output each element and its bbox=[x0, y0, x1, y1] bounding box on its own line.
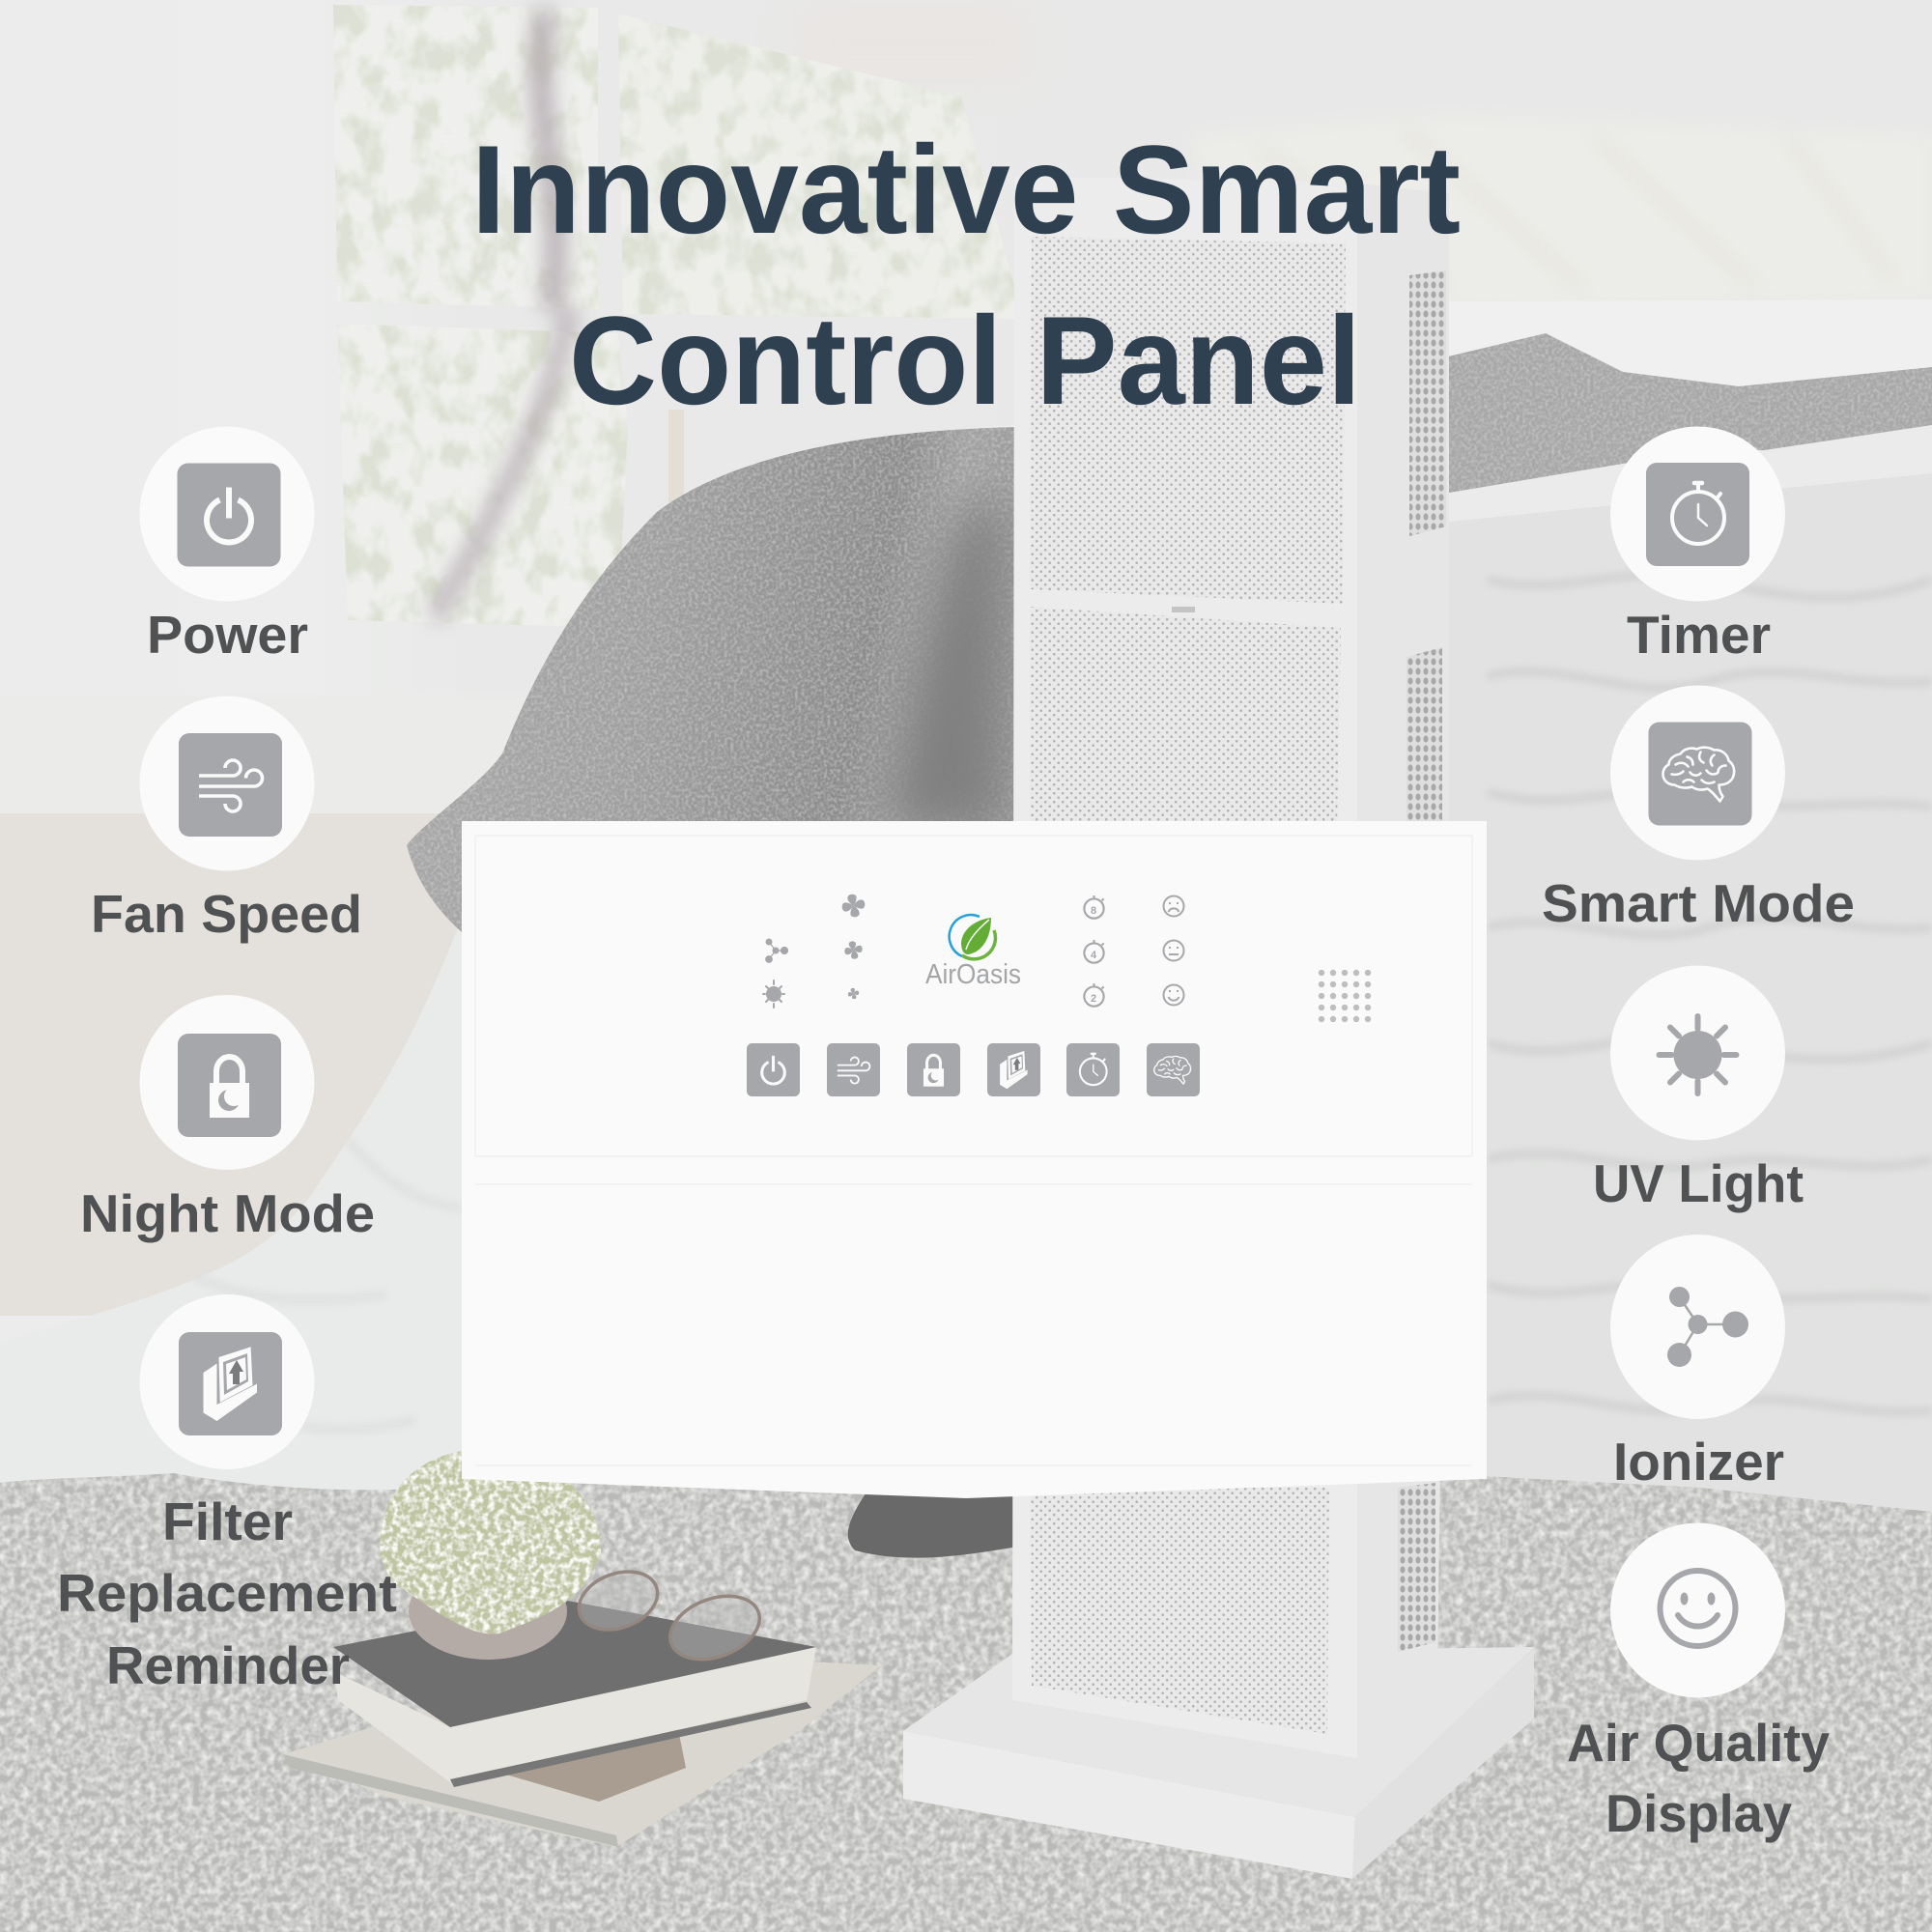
feature: UV Light bbox=[1593, 966, 1804, 1213]
feature: Fan Speed: Fan Speed bbox=[91, 884, 362, 944]
button: night mode bbox=[907, 1043, 960, 1096]
grey blanket bbox=[407, 427, 1019, 932]
pillows on bed bbox=[1188, 116, 1932, 319]
feature: Smart Mode: Smart Mode bbox=[1542, 873, 1855, 933]
feature: Filter Replacement Reminder: Reminder bbox=[106, 1635, 350, 1695]
feature: Power bbox=[139, 427, 315, 665]
button: timer bbox=[1066, 1043, 1120, 1096]
feature: Night Mode bbox=[80, 995, 375, 1243]
purifier tower bbox=[903, 176, 1534, 1879]
icon: fan speed low bbox=[848, 988, 859, 999]
icon: timer 8h: 8 bbox=[1091, 905, 1096, 917]
logo: AirOasis bbox=[925, 915, 1021, 990]
button: power bbox=[747, 1043, 800, 1096]
icon: timer 4h: 4 bbox=[1091, 950, 1097, 961]
books with plant and glasses bbox=[283, 1449, 881, 1847]
feature: Air Quality Display: Display bbox=[1605, 1783, 1792, 1843]
button: fan speed bbox=[827, 1043, 880, 1096]
speaker dot grid bbox=[1319, 970, 1371, 1022]
button: filter bbox=[987, 1043, 1040, 1096]
icon: air quality poor bbox=[1163, 896, 1184, 916]
icon: air quality fair bbox=[1163, 941, 1184, 960]
icon: fan speed medium bbox=[844, 941, 863, 959]
sheet above blanket bbox=[628, 425, 1024, 599]
feature: Timer: Timer bbox=[1627, 605, 1771, 665]
feature: Filter Replacement Reminder: Filter bbox=[162, 1492, 293, 1551]
logo: AirOasis: AirOasis bbox=[925, 959, 1021, 990]
feature: Air Quality Display: Air Quality bbox=[1567, 1713, 1830, 1773]
icon: fan speed high bbox=[842, 895, 865, 917]
glasses bbox=[571, 1561, 768, 1671]
pot bbox=[409, 1563, 567, 1660]
feature: Night Mode: Night Mode bbox=[80, 1183, 375, 1243]
feature: Ionizer bbox=[1610, 1235, 1785, 1492]
feature: Fan Speed bbox=[91, 696, 362, 944]
feature: Power: Power bbox=[147, 605, 308, 665]
carpet bbox=[0, 1449, 1932, 1932]
icon: timer 2h bbox=[1084, 983, 1104, 1007]
feature: UV Light: UV Light bbox=[1593, 1153, 1804, 1213]
feature: Timer bbox=[1610, 427, 1785, 665]
feature: Air Quality Display bbox=[1567, 1522, 1830, 1843]
icon: UV indicator bbox=[763, 980, 784, 1008]
icon: ionizer indicator bbox=[766, 939, 788, 962]
window with foliage bbox=[333, 5, 1024, 628]
feature: Filter Replacement Reminder bbox=[57, 1294, 397, 1695]
feature: Ionizer: Ionizer bbox=[1613, 1432, 1784, 1492]
panel: white control panel close-up bbox=[462, 821, 1487, 1498]
title: Innovative Smart bbox=[471, 119, 1461, 260]
plant bbox=[380, 1449, 601, 1634]
bed bbox=[1430, 299, 1932, 1512]
button: smart mode bbox=[1147, 1043, 1200, 1096]
feature: Filter Replacement Reminder: Replacement bbox=[57, 1563, 397, 1623]
blanket bottom fold bbox=[848, 1488, 1024, 1558]
icon: timer 4h bbox=[1084, 940, 1104, 963]
icon: timer 8h bbox=[1084, 895, 1104, 919]
icon: timer 2h: 2 bbox=[1091, 993, 1096, 1005]
white duvet bbox=[0, 918, 462, 1490]
title bbox=[471, 119, 1461, 431]
feature: Smart Mode bbox=[1542, 686, 1855, 933]
icon: air quality good bbox=[1163, 985, 1184, 1005]
title: Control Panel bbox=[569, 290, 1361, 431]
